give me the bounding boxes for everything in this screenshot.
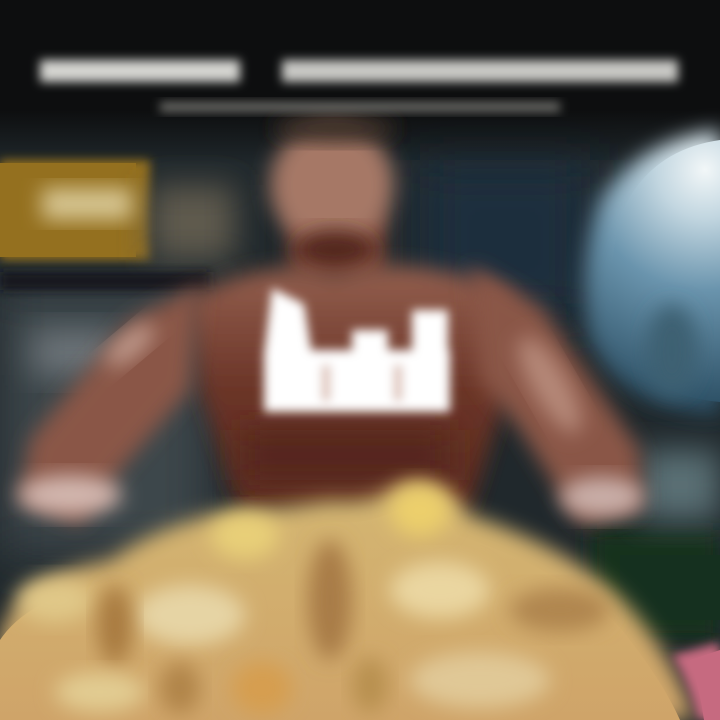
panel: left shelf	[0, 160, 235, 375]
subtitle	[160, 102, 560, 112]
left shoulder highlight	[99, 317, 161, 373]
right arm highlight	[507, 328, 593, 442]
pink surface	[672, 642, 720, 720]
head	[270, 123, 394, 247]
muscular figure	[18, 114, 644, 525]
food pile	[0, 483, 695, 720]
left arm	[20, 285, 200, 525]
label: gold panel text	[42, 188, 132, 220]
right arm	[470, 265, 640, 525]
hair	[273, 114, 397, 142]
chin shadow	[295, 230, 375, 270]
abdomen shadow	[240, 430, 450, 480]
globe	[584, 130, 720, 520]
title	[40, 60, 678, 82]
torso	[190, 266, 510, 510]
right hand	[560, 477, 644, 517]
neck	[290, 210, 385, 280]
chest label	[264, 288, 450, 412]
left hand	[18, 475, 122, 515]
